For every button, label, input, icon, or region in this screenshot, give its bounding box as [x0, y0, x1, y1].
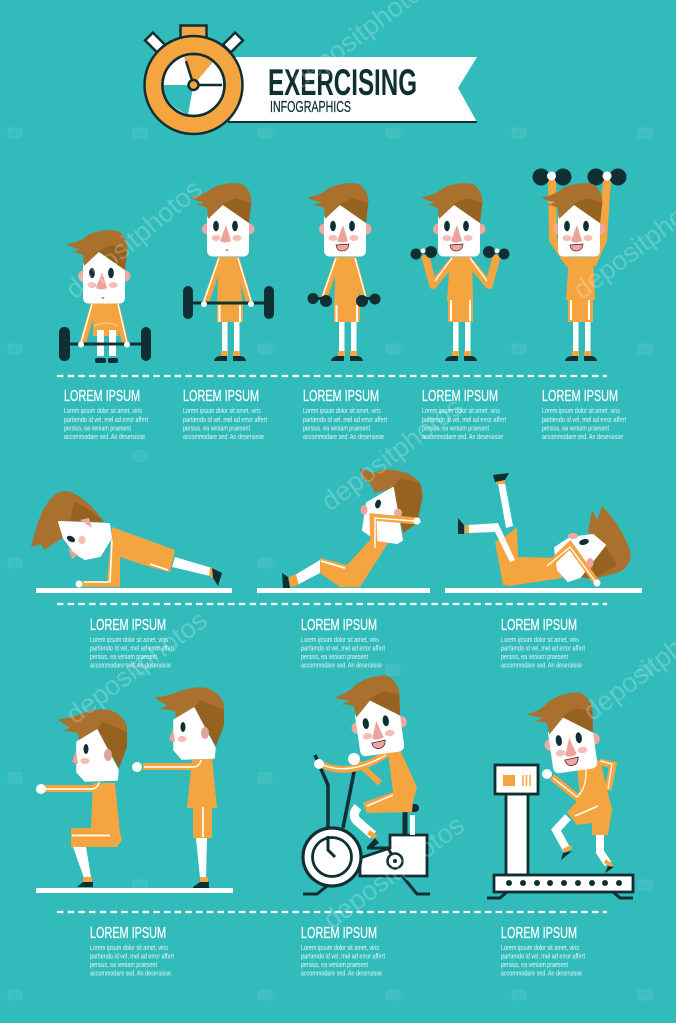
text block: col 2 row 1: LOREM IPSUM	[183, 388, 259, 405]
text block: col 2 row 1	[183, 388, 268, 441]
text block: col 5 row 1: partiendo id vel, mel ad error affert	[542, 415, 627, 424]
text block: col 1 row 3: LOREM IPSUM	[90, 925, 166, 942]
figure: exercise bike	[303, 673, 430, 894]
text block: col 1 row 2: persius, ea veniam praesent	[90, 652, 158, 661]
text block: col 4 row 1: persius, ea veniam praesent	[422, 424, 490, 432]
text block: col 5 row 1: persius, ea veniam praesent	[542, 424, 610, 432]
text block: col 2 row 2	[301, 617, 386, 670]
text block: col 1 row 3: persius, ea veniam praesent	[90, 960, 158, 969]
text block: col 3 row 2: persius, ea veniam praesent	[501, 652, 569, 661]
text block: col 1 row 1: persius, ea veniam praesent	[64, 424, 132, 432]
text block: col 3 row 3	[501, 925, 586, 978]
text block: col 5 row 1: LOREM IPSUM	[542, 388, 618, 405]
text block: col 2 row 1: persius, ea veniam praesent	[183, 424, 251, 432]
text block: col 3 row 1: persius, ea veniam praesent	[303, 424, 371, 432]
text block: col 5 row 1: accommodare sed. An deseruisse	[542, 432, 623, 441]
text block: col 3 row 1: accommodare sed. An deseruisse	[303, 432, 384, 441]
text block: col 2 row 2: accommodare sed. An deseruisse	[301, 660, 382, 670]
figure: dumbbell curl	[410, 183, 510, 361]
text block: col 2 row 3	[301, 925, 386, 978]
text block: col 3 row 3: partiendo id vel, mel ad error affert	[501, 952, 586, 960]
title banner	[228, 57, 477, 122]
figure: treadmill	[487, 690, 633, 898]
text block: col 5 row 1	[542, 388, 627, 441]
text block: col 3 row 2: partiendo id vel, mel ad error affert	[501, 644, 586, 652]
text block: col 1 row 2: LOREM IPSUM	[90, 617, 166, 634]
text block: col 3 row 1: LOREM IPSUM	[303, 388, 379, 405]
text block: col 1 row 1	[64, 388, 149, 441]
text block: col 1 row 1: partiendo id vel, mel ad error affert	[64, 415, 149, 424]
figure: squat side view	[36, 709, 127, 887]
text block: col 3 row 1: Lorem ipsum dolor sit amet, viris	[303, 406, 381, 415]
text block: col 2 row 2: LOREM IPSUM	[301, 617, 377, 634]
figure: deadlift squat	[59, 230, 151, 363]
text block: col 4 row 1: LOREM IPSUM	[422, 388, 498, 405]
text block: col 2 row 1: partiendo id vel, mel ad error affert	[183, 415, 268, 424]
text block: col 2 row 3: Lorem ipsum dolor sit amet, viris	[301, 943, 379, 952]
text block: col 1 row 3: partiendo id vel, mel ad error affert	[90, 952, 175, 960]
watermarks: depositphotos	[60, 174, 208, 305]
ground: row two	[36, 588, 642, 593]
text block: col 2 row 1: Lorem ipsum dolor sit amet, viris	[183, 406, 261, 415]
text block: col 3 row 3: persius, ea veniam praesent	[501, 960, 569, 969]
text block: col 3 row 3: LOREM IPSUM	[501, 925, 577, 942]
text block: col 1 row 3: Lorem ipsum dolor sit amet, viris	[90, 943, 168, 952]
text block: col 3 row 3: Lorem ipsum dolor sit amet, viris	[501, 943, 579, 952]
text block: col 5 row 1: Lorem ipsum dolor sit amet, viris	[542, 406, 620, 415]
figure: standing arms forward	[132, 687, 224, 888]
icon: barbell	[59, 327, 151, 361]
text block: col 1 row 2: accommodare sed. An deseruisse	[90, 660, 171, 670]
text block: col 2 row 1: accommodare sed. An deseruisse	[183, 432, 264, 441]
text block: col 4 row 1: partiendo id vel, mel ad error affert	[422, 415, 507, 424]
figure: push-up	[31, 491, 222, 588]
icon: dumbbells	[532, 168, 626, 186]
heading: exercising: EXERCISING	[268, 62, 417, 103]
text block: col 4 row 1: accommodare sed. An deseruisse	[422, 432, 503, 441]
text block: col 1 row 3	[90, 925, 175, 978]
text block: col 1 row 2: partiendo id vel, mel ad error affert	[90, 644, 175, 652]
subheading: infographics: INFOGRAPHICS	[270, 99, 351, 116]
text block: col 1 row 1: LOREM IPSUM	[64, 388, 140, 405]
icon: dumbbells	[410, 246, 510, 260]
text block: col 4 row 1: Lorem ipsum dolor sit amet, viris	[422, 406, 500, 415]
text block: col 3 row 2	[501, 617, 586, 670]
text block: col 3 row 1: partiendo id vel, mel ad error affert	[303, 415, 388, 424]
figure: overhead press	[532, 168, 626, 361]
text block: col 2 row 3: partiendo id vel, mel ad error affert	[301, 952, 386, 960]
text block: col 2 row 2: persius, ea veniam praesent	[301, 652, 369, 661]
figure: leg raise	[458, 473, 631, 586]
text block: col 3 row 2: Lorem ipsum dolor sit amet, viris	[501, 635, 579, 644]
figure: sit-up	[282, 468, 423, 588]
text block: col 3 row 1	[303, 388, 388, 441]
text block: col 3 row 2: LOREM IPSUM	[501, 617, 577, 634]
text block: col 1 row 1: accommodare sed. An deseruisse	[64, 432, 145, 441]
watermarks: depositphotos	[318, 810, 470, 935]
ground: row three	[36, 888, 233, 893]
text block: col 1 row 2: Lorem ipsum dolor sit amet, viris	[90, 635, 168, 644]
text block: col 3 row 2: accommodare sed. An deseruisse	[501, 660, 582, 670]
text block: col 1 row 1: Lorem ipsum dolor sit amet, viris	[64, 406, 142, 415]
text block: col 4 row 1	[422, 388, 507, 441]
text block: col 2 row 3: accommodare sed. An deseruisse	[301, 968, 382, 978]
watermarks: depositphotos	[316, 392, 468, 517]
icon: dumbbells	[308, 293, 380, 307]
figure: dumbbells at side	[307, 183, 380, 361]
figure: barbell standing	[183, 183, 274, 361]
watermarks: depositphotos	[61, 605, 213, 730]
icon: barbell	[183, 286, 274, 319]
text block: col 2 row 2: partiendo id vel, mel ad error affert	[301, 644, 386, 652]
text block: col 3 row 3: accommodare sed. An deseruisse	[501, 968, 582, 978]
icon: stopwatch	[144, 26, 243, 134]
text block: col 2 row 3: persius, ea veniam praesent	[301, 960, 369, 969]
text block: col 2 row 2: Lorem ipsum dolor sit amet, viris	[301, 635, 379, 644]
text block: col 1 row 3: accommodare sed. An deseruisse	[90, 968, 171, 978]
text block: col 2 row 3: LOREM IPSUM	[301, 925, 377, 942]
text block: col 1 row 2	[90, 617, 175, 670]
